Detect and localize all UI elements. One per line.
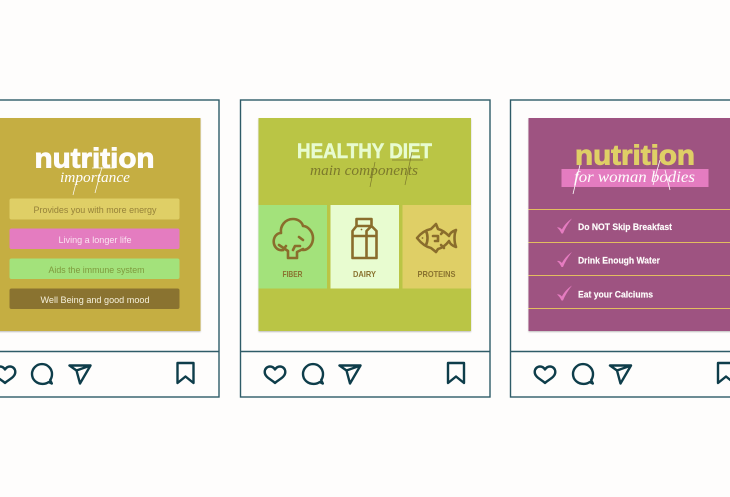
icon: heart: [535, 366, 555, 383]
tip: calcium: [557, 286, 653, 300]
card frame: [510, 100, 730, 397]
icon: heart: [0, 366, 15, 383]
subheading: importance: [60, 167, 130, 195]
icon: share: [610, 366, 631, 384]
icon: check: [557, 218, 572, 234]
icon: share: [70, 366, 90, 384]
heading: nutrition: nutrition: [575, 140, 695, 170]
tile: fiber: [258, 205, 327, 288]
icon: check: [557, 252, 572, 267]
benefit: longer life: Living a longer life: [58, 235, 132, 246]
icon: bookmark: [718, 363, 730, 383]
icon: share: [340, 366, 360, 384]
subheading: main components: main components: [310, 163, 418, 179]
benefit: immune system: Aids the immune system: [48, 265, 145, 276]
icon: comment: [32, 364, 52, 384]
icon: bookmark: [178, 363, 194, 383]
label: dairy: DAIRY: [353, 269, 376, 279]
tile: dairy: [330, 205, 399, 288]
benefit: well being: Well Being and good mood: [40, 295, 150, 306]
divider lines: [528, 210, 730, 308]
icon: comment: [573, 364, 593, 384]
icon: comment: [303, 364, 323, 384]
icon: broccoli: [274, 219, 313, 258]
tile: proteins: [402, 205, 471, 288]
benefit: well being: [10, 288, 180, 309]
icon: fish: [417, 224, 456, 252]
post card: healthy diet: [240, 100, 490, 397]
tip: calcium: Eat your Calciums: [578, 290, 653, 300]
subheading band: for woman bodies: [562, 160, 708, 194]
card frame: [0, 100, 219, 397]
heading: healthy diet: HEALTHY DIET: [297, 140, 432, 163]
subheading band: for woman bodies: for woman bodies: [574, 169, 695, 186]
benefit: more energy: Provides you with more energy: [34, 205, 157, 216]
icon: bookmark: [448, 363, 464, 383]
subheading: importance: importance: [60, 170, 130, 186]
label: fiber: FIBER: [282, 269, 302, 279]
panel: healthy diet background: [258, 118, 471, 331]
icon: check: [557, 286, 572, 300]
heading: nutrition: nutrition: [34, 142, 154, 174]
tip: water: [557, 252, 660, 267]
tip: breakfast: [557, 218, 672, 234]
label: proteins: PROTEINS: [418, 269, 456, 279]
tip: breakfast: Do NOT Skip Breakfast: [578, 222, 672, 232]
icon: milk carton: [352, 219, 376, 258]
tip: water: Drink Enough Water: [578, 256, 660, 266]
panel: woman bodies background: [528, 118, 730, 331]
benefit: more energy: [10, 198, 180, 220]
benefit: immune system: [10, 258, 180, 279]
card frame: [240, 100, 490, 397]
post card: nutrition importance: [0, 100, 219, 397]
post card: nutrition for woman bodies: [510, 100, 730, 397]
subheading: main components: [310, 152, 423, 187]
icon: heart: [265, 366, 285, 383]
benefit: longer life: [10, 228, 180, 249]
panel: importance background: [0, 118, 200, 331]
